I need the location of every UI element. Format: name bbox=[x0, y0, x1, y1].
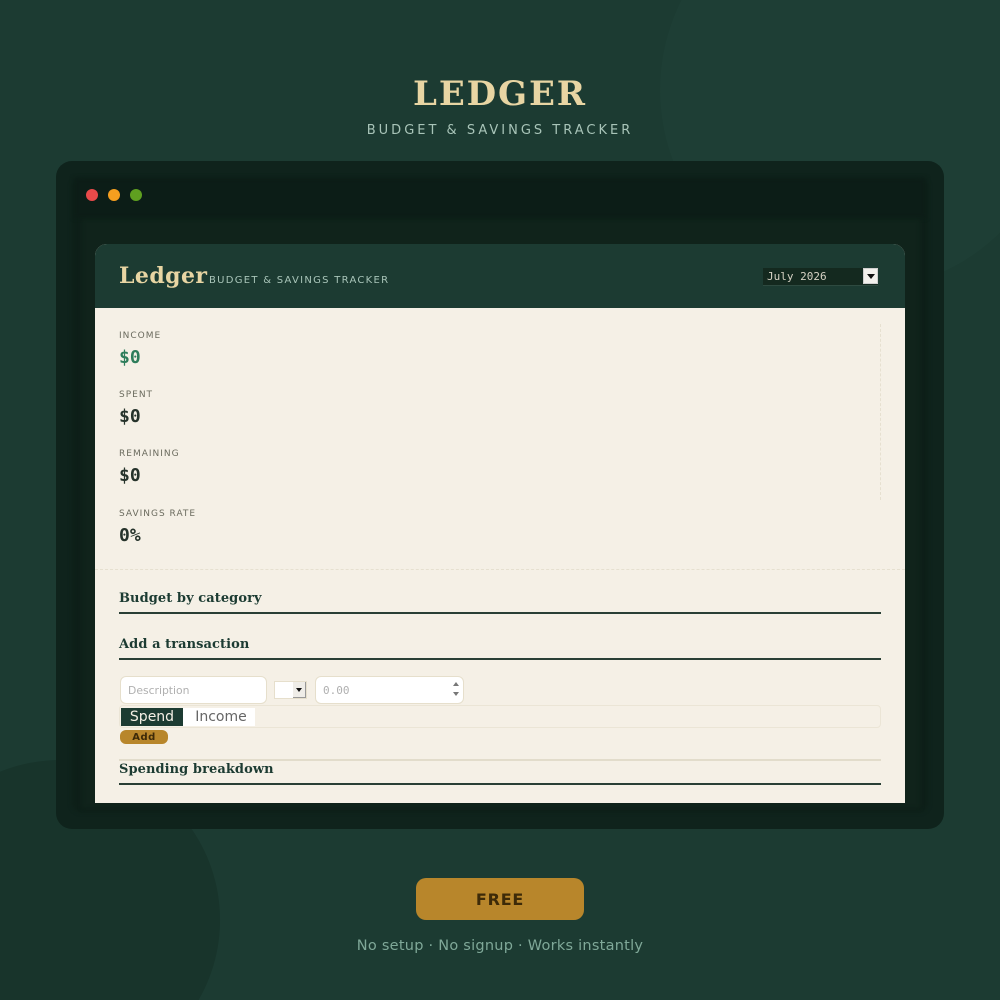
app header logo: Ledger bbox=[119, 263, 207, 289]
amount input: 0.00 bbox=[323, 684, 350, 697]
amount spinner up bbox=[453, 682, 459, 686]
income value: $0 bbox=[119, 347, 141, 368]
free badge bbox=[416, 878, 584, 920]
add button: Add bbox=[132, 732, 156, 743]
remaining label: REMAINING bbox=[119, 449, 180, 459]
stat: spent bbox=[119, 390, 153, 427]
spend option: Spend bbox=[130, 709, 174, 725]
window control: red dot bbox=[86, 189, 98, 201]
spent value: $0 bbox=[119, 406, 141, 427]
inner window shade bbox=[72, 178, 928, 812]
amount input bbox=[315, 676, 464, 704]
background circle: bottom left bbox=[0, 760, 220, 1000]
heading: spending breakdown: Spending breakdown bbox=[119, 762, 274, 777]
remaining value: $0 bbox=[119, 465, 141, 486]
stat: income bbox=[119, 331, 161, 368]
month value: July 2026 bbox=[767, 270, 827, 283]
savings rate label: SAVINGS RATE bbox=[119, 509, 196, 519]
type toggle bbox=[121, 708, 255, 726]
heading: add a transaction: Add a transaction bbox=[119, 637, 249, 652]
title: LEDGER bbox=[413, 74, 587, 114]
app header tagline: BUDGET & SAVINGS TRACKER bbox=[209, 275, 389, 286]
transaction form row bbox=[120, 676, 464, 704]
income label: INCOME bbox=[119, 331, 161, 341]
inner window body bbox=[82, 218, 920, 808]
month selector bbox=[763, 268, 878, 286]
income option: Income bbox=[195, 709, 247, 725]
background circle: top right bbox=[660, 0, 1000, 290]
spent label: SPENT bbox=[119, 390, 153, 400]
window control: amber dot bbox=[108, 189, 120, 201]
stat: remaining bbox=[119, 449, 180, 486]
description input: Description bbox=[128, 684, 190, 697]
savings rate value: 0% bbox=[119, 525, 141, 546]
free badge: FREE bbox=[476, 890, 524, 909]
app panel bbox=[95, 244, 905, 803]
window control: green dot bbox=[130, 189, 142, 201]
category dropdown arrow bbox=[293, 682, 306, 698]
dropdown arrow bbox=[863, 268, 878, 284]
subtitle: BUDGET & SAVINGS TRACKER bbox=[367, 123, 633, 138]
app header bar bbox=[95, 244, 905, 308]
heading: budget by category: Budget by category bbox=[119, 591, 262, 606]
footer note: No setup · No signup · Works instantly bbox=[357, 938, 643, 954]
description input bbox=[120, 676, 267, 704]
stat: savings rate bbox=[119, 509, 196, 546]
spend option bbox=[121, 708, 183, 726]
add button bbox=[120, 730, 168, 744]
window title bar bbox=[74, 178, 926, 218]
category select bbox=[274, 681, 307, 699]
browser window frame bbox=[56, 161, 944, 829]
amount spinner down bbox=[453, 692, 459, 696]
